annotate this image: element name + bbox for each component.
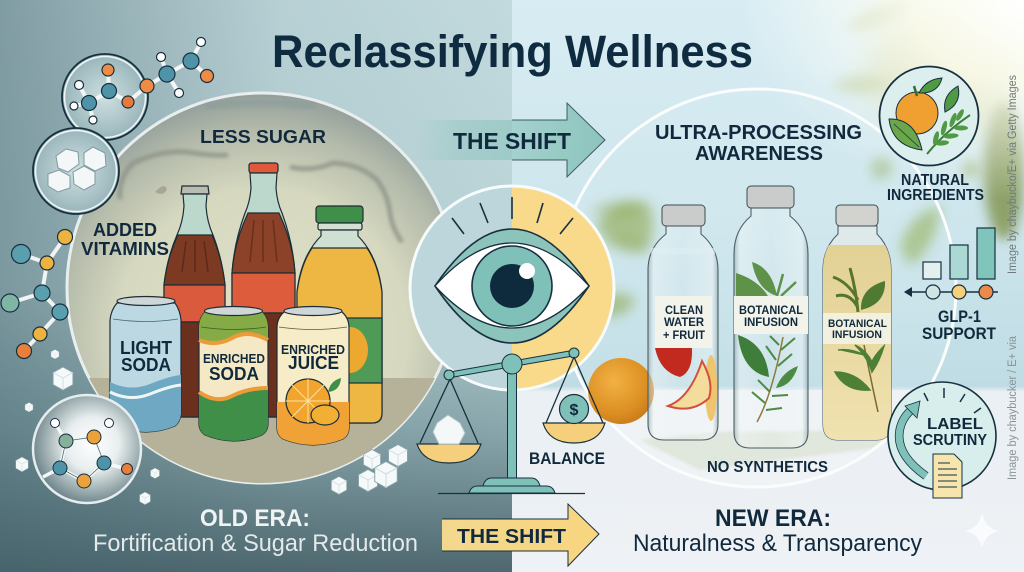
background: new era panel — [512, 0, 1024, 572]
label: natural ingredients: INGREDIENTS — [887, 187, 984, 204]
arrow: the shift bottom — [442, 504, 599, 566]
decorative sparkle — [965, 513, 999, 548]
label: botanical infusion: BOTANICAL — [828, 318, 887, 330]
arrow: the shift bottom: THE SHIFT — [457, 526, 566, 548]
label: added vitamins — [81, 220, 169, 259]
molecule: left side chain — [1, 230, 72, 358]
icon: dollar coin — [560, 394, 588, 424]
label: added vitamins: ADDED — [93, 220, 157, 240]
era caption: old era: OLD ERA: — [200, 505, 310, 532]
bottle: cola left — [164, 186, 225, 417]
icon: document — [933, 454, 962, 498]
label: botanical infusion: BOTANICAL — [739, 305, 803, 317]
icon: label scrutiny badge — [888, 382, 996, 498]
can: light soda — [110, 296, 181, 432]
label: botanical infusion: INFUSION — [832, 329, 882, 341]
label: glp-1 support — [922, 307, 997, 343]
era caption: new era: Naturalness & Transparency — [633, 530, 922, 557]
icon: eye — [435, 229, 589, 343]
icon: balance scale — [417, 348, 605, 494]
heading: ultra-processing awareness: AWARENESS — [695, 143, 823, 165]
arrow: the shift top: THE SHIFT — [453, 128, 571, 154]
label: less sugar: LESS SUGAR — [200, 127, 326, 147]
label: balance: BALANCE — [529, 449, 605, 468]
can: light soda: SODA — [121, 355, 171, 375]
label: botanical infusion — [734, 296, 808, 334]
bottle: clean water and fruit — [648, 205, 718, 440]
era caption: new era — [633, 505, 922, 557]
background: old era panel — [0, 0, 512, 572]
can: enriched juice: JUICE — [288, 353, 339, 373]
can: enriched juice: ENRICHED — [281, 342, 345, 357]
icon: sugar cube on pan — [433, 415, 465, 444]
credit: getty images upper: Image by chaybucko/E+ via Getty Images — [1007, 75, 1019, 274]
era caption: new era: NEW ERA: — [715, 505, 831, 532]
label: clean water + fruit: CLEAN — [665, 305, 703, 317]
label: label scrutiny: LABEL — [927, 416, 983, 433]
label: clean water + fruit: WATER — [664, 317, 705, 329]
panel: old era circle with beverages — [66, 92, 443, 484]
can: enriched soda: SODA — [209, 364, 259, 384]
title: Reclassifying Wellness — [272, 26, 753, 77]
arrow: the shift top — [415, 103, 605, 177]
can: enriched soda: ENRICHED — [203, 352, 265, 366]
molecule: sugar dusted bubble — [33, 395, 141, 503]
label: label scrutiny — [913, 416, 987, 449]
credit: getty images lower: Image by chaybucker / E+ via — [1007, 335, 1019, 480]
icon: rays — [452, 197, 573, 234]
scale base — [438, 478, 585, 494]
icon: sugar crystals bubble — [33, 128, 119, 214]
bottle: botanical infusion amber — [823, 205, 891, 440]
era caption: old era: Fortification & Sugar Reduction — [93, 530, 418, 557]
sugar cubes: scattered — [16, 350, 407, 505]
molecule: top left bubble — [62, 38, 214, 140]
label: botanical infusion: INFUSION — [744, 317, 798, 329]
label: no synthetics: NO SYNTHETICS — [707, 459, 828, 476]
label: natural ingredients — [887, 172, 984, 204]
bottle: cola middle — [232, 163, 295, 417]
can: enriched juice — [277, 306, 349, 445]
label: glp-1 support: SUPPORT — [922, 324, 997, 343]
chart: rising bars — [923, 228, 995, 279]
bottle: juice — [297, 206, 382, 423]
fruit: orange on table — [588, 358, 654, 424]
can: enriched soda — [199, 306, 268, 441]
label: added vitamins: VITAMINS — [81, 239, 169, 259]
bottle: botanical infusion clear — [734, 186, 808, 448]
label: label scrutiny: SCRUTINY — [913, 432, 987, 449]
icon: natural ingredients badge — [880, 66, 978, 166]
can: light soda: LIGHT — [120, 338, 172, 358]
label: clean water + fruit — [655, 296, 712, 348]
panel: eye on balance circle — [410, 186, 614, 390]
icon: dollar coin: $ — [570, 402, 579, 419]
era caption: old era — [93, 505, 418, 557]
label: natural ingredients: NATURAL — [901, 172, 969, 189]
icon: glp-1 timeline — [904, 285, 998, 299]
heading: ultra-processing awareness — [655, 122, 862, 165]
heading: ultra-processing awareness: ULTRA-PROCESSING — [655, 122, 862, 144]
label: glp-1 support: GLP-1 — [938, 307, 981, 326]
label: botanical infusion — [823, 313, 891, 344]
label: clean water + fruit: + FRUIT — [663, 330, 705, 342]
panel: new era circle with water bottles — [555, 89, 965, 490]
